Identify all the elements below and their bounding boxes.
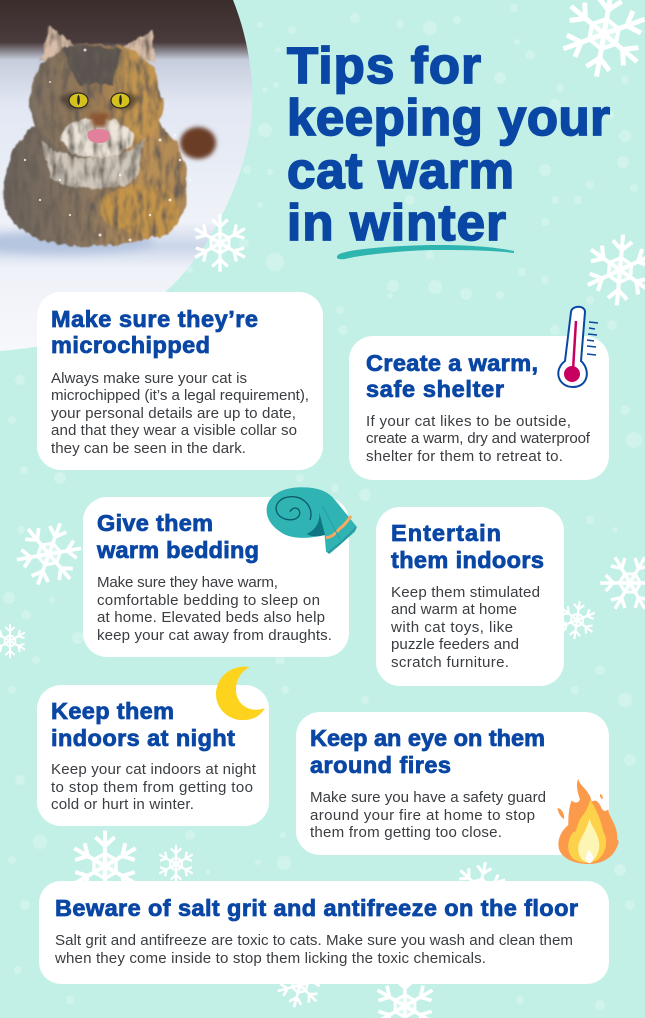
title: in winter bbox=[287, 194, 506, 251]
body text: cold or hurt in winter. bbox=[51, 796, 194, 813]
title: Tips for bbox=[287, 37, 481, 94]
panel: salt grit and antifreeze bbox=[39, 881, 609, 984]
body text: and that they wear a visible collar so bbox=[51, 422, 297, 439]
body text: at home. Elevated beds also help bbox=[97, 609, 325, 626]
panel: shelter: safe shelter bbox=[366, 376, 504, 402]
body text: Salt grit and antifreeze are toxic to cats. Make sure you wash and clean them bbox=[55, 932, 573, 949]
panel: indoors at night bbox=[37, 685, 269, 826]
body text bbox=[366, 413, 591, 465]
heading: Beware of salt grit and antifreeze on the floor bbox=[55, 895, 578, 921]
heading: Make sure they’re bbox=[51, 306, 258, 332]
panel: shelter bbox=[349, 336, 609, 480]
body text: scratch furniture. bbox=[391, 654, 509, 671]
body text: Keep your cat indoors at night bbox=[51, 761, 257, 778]
body text: around your fire at home to stop bbox=[310, 807, 535, 824]
body text: to stop them from getting too bbox=[51, 779, 253, 796]
snowflake over photo bbox=[191, 214, 249, 272]
title: keeping your bbox=[287, 89, 610, 146]
title: cat warm bbox=[287, 142, 514, 199]
body text bbox=[51, 761, 257, 813]
panel: entertain: them indoors bbox=[391, 547, 544, 573]
photo: cat in snow bbox=[0, 0, 260, 352]
panel: microchipped: microchipped bbox=[51, 332, 210, 358]
body text bbox=[54, 932, 573, 967]
body text: Make sure you have a safety guard bbox=[310, 789, 546, 806]
body text bbox=[310, 789, 546, 841]
panel: indoors at night: indoors at night bbox=[51, 725, 235, 751]
heading: Keep them bbox=[51, 698, 174, 724]
heading: Give them bbox=[97, 510, 213, 536]
body text: keep your cat away from draughts. bbox=[97, 627, 332, 644]
cat tongue bbox=[87, 129, 110, 143]
body text bbox=[390, 584, 540, 671]
cat tail bbox=[180, 127, 216, 159]
panel: bedding bbox=[83, 497, 349, 657]
body text: them from getting too close. bbox=[310, 824, 502, 841]
body text: Keep them stimulated bbox=[391, 584, 540, 601]
icon: flame bbox=[557, 778, 619, 864]
body text: your personal details are up to date, bbox=[51, 405, 296, 422]
body text: Always make sure your cat is bbox=[51, 370, 247, 387]
body text: puzzle feeders and bbox=[391, 636, 519, 653]
icon: moon bbox=[216, 667, 265, 720]
icon: blanket bbox=[267, 487, 357, 554]
title underline swoosh bbox=[337, 245, 514, 259]
cat fur bbox=[3, 26, 187, 246]
panel: fires: around fires bbox=[310, 752, 451, 778]
body text: create a warm, dry and waterproof bbox=[366, 430, 591, 447]
body text: Make sure they have warm, bbox=[97, 574, 278, 591]
body text: and warm at home bbox=[391, 601, 517, 618]
icon: thermometer bbox=[558, 307, 598, 387]
heading: Create a warm, bbox=[366, 350, 538, 376]
body text bbox=[51, 370, 309, 457]
body text: they can be seen in the dark. bbox=[51, 440, 246, 457]
body text: when they come inside to stop them licking the toxic chemicals. bbox=[54, 950, 486, 967]
body text: If your cat likes to be outside, bbox=[366, 413, 571, 430]
panel: microchipped bbox=[37, 292, 323, 470]
title bbox=[287, 37, 610, 251]
cat eyes bbox=[58, 92, 140, 110]
heading: Entertain bbox=[391, 520, 501, 546]
body text: microchipped (it’s a legal requirement), bbox=[51, 387, 309, 404]
panel: fires bbox=[296, 712, 609, 855]
body text: with cat toys, like bbox=[390, 619, 513, 636]
cat nose bbox=[89, 113, 109, 127]
body text: shelter for them to retreat to. bbox=[366, 448, 563, 465]
panel: entertain bbox=[376, 507, 564, 686]
body text bbox=[97, 574, 332, 644]
panel: bedding: warm bedding bbox=[96, 537, 259, 563]
heading: Keep an eye on them bbox=[310, 725, 545, 751]
body text: comfortable bedding to sleep on bbox=[97, 592, 320, 609]
snow sparkle on fur bbox=[24, 48, 191, 242]
